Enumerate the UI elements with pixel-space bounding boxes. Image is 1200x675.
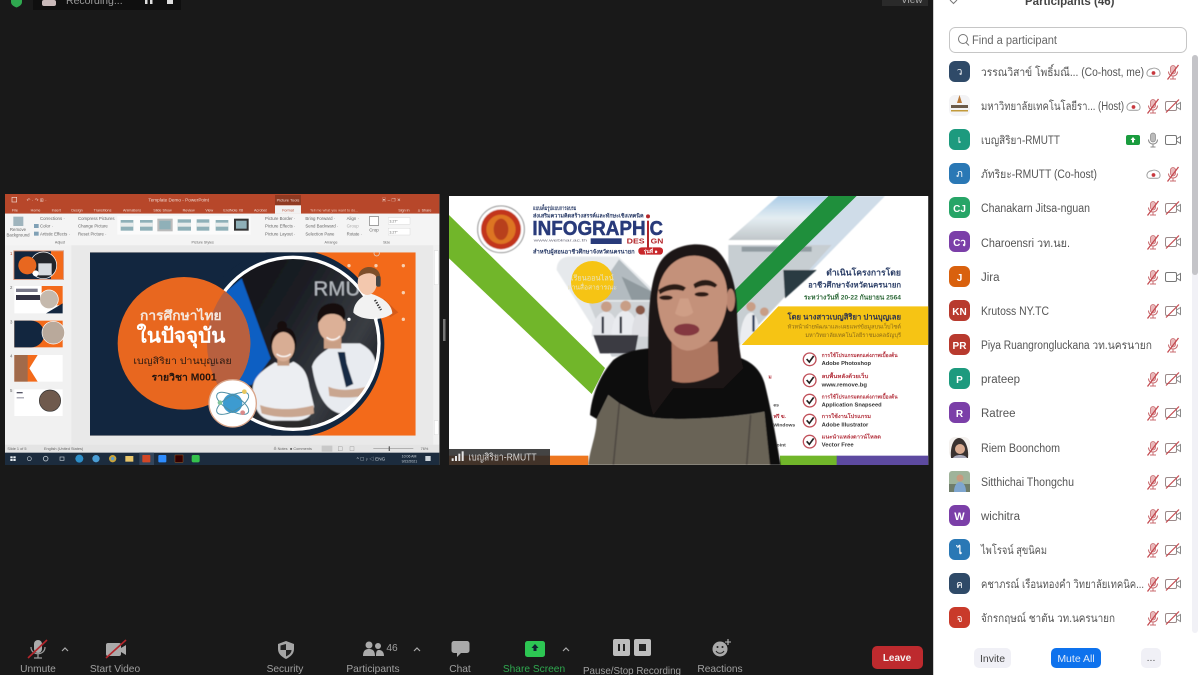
participant row 9: Piya Ruangrongluckana วท.นครนายก: [981, 340, 1152, 352]
panel: participants sidebar: [933, 0, 1200, 675]
participant row 13: Sitthichai Thongchu: [981, 477, 1074, 489]
slide thumbnails: 1: [10, 251, 13, 256]
student: girl: [253, 321, 314, 428]
participant row 16: [949, 573, 1180, 594]
project description: ดำเนินโครงการโดย: [826, 267, 901, 278]
slide photo with two students: [226, 259, 378, 428]
Windows taskbar: [5, 453, 439, 465]
project description: อาชีวศึกษาจังหวัดนครนายก: [808, 281, 901, 290]
hidden left checklist fragments: ฟรี ฆ.: [773, 413, 787, 420]
reactions button: Reactions: [697, 664, 743, 675]
participant row 3: เบญสิริยา-RMUTT: [981, 134, 1060, 147]
yellow circle badge: เรียนออนไลน์: [571, 274, 614, 283]
participant row 10: P: [956, 375, 963, 386]
participant row 9: [949, 334, 1178, 355]
share screen button: Share Screen: [503, 664, 565, 675]
participant row 15: [949, 539, 1180, 560]
orange title circle: [118, 277, 250, 410]
hidden left checklist fragments: Point: [773, 443, 786, 449]
mute all button: [1051, 648, 1101, 668]
poster title: แบบเต็มรูปแบบการอบรม: [533, 203, 577, 213]
white ring: [207, 257, 379, 429]
poster title: INFOGRAPH: [532, 218, 646, 240]
PowerPoint title bar: Template Demo - PowerPoint: [148, 198, 210, 203]
PowerPoint status bar: 76%: [421, 447, 429, 451]
participant row 11: [949, 402, 1180, 423]
PowerPoint ribbon: Picture Styles: [191, 240, 214, 244]
poster title: www.webinar.ac.th: [534, 238, 587, 243]
participant row 13: [949, 471, 1180, 492]
participant row 16: ค: [956, 580, 963, 591]
poster title: DES: [627, 236, 645, 245]
hidden left checklist fragments: Windows: [773, 423, 795, 429]
view button: [882, 0, 928, 6]
orange title circle: ในปัจจุบัน: [137, 324, 225, 349]
PowerPoint title bar: ♙ Share: [417, 208, 431, 212]
participant row 2: [949, 95, 1180, 116]
PowerPoint title bar: Sign in: [398, 208, 410, 212]
presenter name label: [449, 449, 550, 465]
more button: [1141, 648, 1161, 668]
PowerPoint ribbon: Send Backward ·: [305, 224, 338, 229]
participants button: 46: [386, 643, 398, 654]
checklist items: ลบพื้นหลังด้วยเว็บ: [822, 371, 869, 380]
yellow speaker band: หัวหน้าฝ่ายพัฒนาและเผยแพร่ข้อมูลบนเว็บไซต์: [788, 321, 901, 330]
participant row 8: Krutoss NY.TC: [981, 306, 1049, 318]
participant row 17: จักรกฤษณ์ ชาตัน วท.นครนายก: [981, 611, 1115, 625]
student: boy: [312, 303, 376, 413]
icon: green shield: [11, 0, 22, 8]
PowerPoint ribbon: Rotate ·: [347, 231, 362, 236]
participant row 4: [949, 163, 1178, 184]
PowerPoint ribbon: Compress Pictures: [78, 216, 115, 221]
gallery divider handle: [443, 319, 446, 341]
PowerPoint ribbon: Crop: [369, 228, 379, 233]
participant row 14: wichitra: [980, 511, 1021, 523]
participant row 1: ว: [957, 67, 962, 78]
PowerPoint ribbon: Background: [6, 233, 30, 238]
PowerPoint ribbon: Change Picture: [78, 224, 108, 229]
presenter name label: เบญสิริยา-RMUTT: [468, 453, 537, 464]
PowerPoint ribbon: Selection Pane: [305, 231, 335, 236]
participant row 5: CJ: [953, 204, 966, 215]
checklist items: การใช้งานโปรแกรม: [822, 412, 871, 420]
sidebar heading: [950, 0, 1115, 8]
participant row 14: [949, 505, 1180, 526]
more button: ...: [1147, 652, 1155, 664]
yellow circle badge: ผ่านสื่อสาธารณะ: [568, 282, 617, 291]
chat button: Chat: [449, 664, 471, 675]
participant row 8: [949, 300, 1180, 321]
PowerPoint ribbon: Artistic Effects ·: [40, 231, 70, 236]
PowerPoint title bar: Design: [71, 208, 83, 212]
Windows taskbar: 9/22/2021: [402, 460, 417, 464]
PowerPoint title bar: Picture Tools: [277, 198, 299, 203]
PowerPoint ribbon: Size: [383, 240, 390, 244]
participant row 6: [949, 231, 1180, 252]
checklist items: Adobe Illustrator: [822, 423, 868, 429]
participant row 10: prateep: [981, 374, 1020, 386]
participant row 4: ภ: [956, 169, 963, 180]
hidden left checklist fragments: [768, 374, 795, 449]
PowerPoint title bar: Insert: [52, 208, 61, 212]
poster title: รุ่นที่ ๑: [644, 247, 658, 255]
PowerPoint ribbon: 3.27": [389, 220, 398, 224]
panel: presenter video: [449, 196, 928, 465]
PowerPoint title bar: Format: [282, 208, 294, 212]
PowerPoint ribbon: Arrange: [324, 240, 338, 244]
participant row 14: W: [954, 511, 965, 523]
PowerPoint title bar: ▣ – ❐ ✕: [382, 197, 401, 202]
PowerPoint ribbon: Reset Picture ·: [78, 231, 107, 236]
PowerPoint ribbon: Group: [347, 224, 359, 229]
project description: ระหว่างวันที่ 20-22 กันยายน 2564: [804, 292, 901, 302]
PowerPoint status bar: ■ Comments: [290, 447, 312, 451]
slide title: การศึกษาไทย: [140, 307, 222, 323]
participant row 7: [949, 266, 1180, 287]
participant row 2: มหาวิทยาลัยเทคโนโลยีรา... (Host): [981, 99, 1124, 113]
PowerPoint status bar: [5, 445, 439, 453]
PowerPoint ribbon: Picture Effects ·: [265, 224, 295, 229]
panel: shared PowerPoint screen: [5, 194, 439, 465]
bottom toolbar: [20, 639, 923, 675]
yellow circle badge: [568, 261, 617, 304]
search box: [950, 28, 1186, 52]
pause/stop recording button: [583, 639, 681, 675]
search box: Find a participant: [972, 35, 1058, 47]
checklist items: Application Snapseed: [822, 403, 882, 409]
slide thumbnails: 4: [10, 354, 13, 359]
poster title: [532, 203, 664, 256]
participant row 15: ไพโรจน์ สุขนิคม: [980, 543, 1047, 557]
PowerPoint title bar: Tell me what you want to do...: [310, 208, 358, 212]
slide thumbnails: 5: [10, 388, 13, 393]
participant row 7: Jira: [981, 272, 1000, 284]
security button: [267, 641, 304, 675]
participant row 6: Charoensri วท.นย.: [981, 238, 1070, 250]
PowerPoint ribbon: Corrections ·: [40, 216, 65, 221]
participant row 11: Ratree: [981, 408, 1016, 420]
PowerPoint ribbon: Color ·: [40, 224, 53, 229]
project description: [804, 267, 901, 302]
checklist items: Adobe Photoshop: [822, 361, 872, 367]
start video button: Start Video: [90, 664, 140, 675]
top status bar: [11, 0, 928, 10]
leave button: [872, 646, 923, 669]
participant list: [949, 61, 1180, 628]
main slide: [90, 249, 416, 438]
icon: atom badge: [209, 380, 256, 427]
invite button: [974, 648, 1011, 668]
background poster photo panel: [557, 196, 885, 357]
participant row 17: จ: [957, 614, 963, 625]
logo seal: [478, 206, 524, 253]
share screen button: [503, 641, 569, 675]
PowerPoint title bar: ↶ · ↷ ⊞ ·: [27, 197, 47, 202]
participant row 10: [949, 368, 1180, 389]
PowerPoint title bar: Acrobat: [254, 208, 267, 212]
PowerPoint ribbon: Picture Border ·: [265, 216, 295, 221]
scrollbar: [1192, 55, 1198, 633]
PowerPoint title bar: Home: [31, 208, 40, 212]
PowerPoint ribbon: Align ·: [347, 216, 359, 221]
poster staff group: [592, 301, 769, 353]
PowerPoint title bar: Animations: [123, 208, 141, 212]
unmute button: Unmute: [20, 664, 56, 675]
slide thumbnails: 3: [10, 319, 13, 324]
poster title: GN: [651, 236, 664, 245]
PowerPoint title bar: View: [205, 208, 214, 212]
participant row 4: ภัทริยะ-RMUTT (Co-host): [981, 168, 1097, 181]
participant row 7: J: [957, 273, 962, 284]
PowerPoint title bar: Slide Show: [153, 208, 172, 212]
yellow speaker band: [742, 306, 928, 345]
participants button: Participants: [346, 664, 400, 675]
leave button: Leave: [883, 653, 912, 664]
hidden left checklist fragments: es: [773, 403, 779, 409]
PowerPoint ribbon: Bring Forward ·: [305, 216, 335, 221]
PowerPoint title bar: Transitions: [94, 208, 112, 212]
PowerPoint status bar: English (United States): [44, 447, 84, 451]
reactions button: [697, 639, 743, 675]
participant row 3: [949, 129, 1180, 150]
participant row 1: วรรณวิสาข์ โพธิ์มณี... (Co-host, me): [981, 63, 1144, 79]
main video area background: [0, 0, 933, 675]
chat button: [449, 641, 471, 675]
invite button: Invite: [980, 653, 1005, 665]
checklist items: การใช้โปรแกรมตกแต่งภาพเบื้องต้น: [822, 392, 898, 401]
recording indicator: [33, 0, 181, 10]
poster title: ส่งเสริมความคิดสร้างสรรค์และทักษะเชิงเทคนิค: [533, 211, 644, 219]
participant row 6: Cว: [953, 238, 966, 249]
unmute button: [20, 640, 68, 675]
checklist items: แนะนำแหล่งดาวน์โหลด: [822, 433, 882, 441]
PowerPoint ribbon: Picture Layout ·: [265, 231, 295, 236]
participant row 11: R: [956, 409, 964, 420]
PowerPoint ribbon: 3.27": [389, 230, 398, 234]
participant row 5: [949, 197, 1180, 218]
yellow speaker band: โดย นางสาวเบญสิริยา ปานบุญเลย: [786, 311, 901, 322]
participant row 15: ไ: [956, 544, 962, 557]
PowerPoint ribbon: Adjust: [55, 240, 65, 244]
icon: headset agent with selection handles: [347, 251, 405, 321]
dark green diagonal stripe: [735, 196, 857, 315]
security button: Security: [267, 664, 304, 675]
participant row 8: KN: [952, 307, 967, 318]
poster title: C: [650, 218, 663, 240]
slide thumbnails: 2: [10, 285, 13, 290]
PowerPoint scrollbar: [433, 245, 439, 445]
slide thumbnails: [10, 250, 65, 416]
orange title circle: รายวิชา M001: [152, 373, 217, 384]
checklist items: [803, 350, 898, 449]
presenter: [588, 244, 781, 465]
participants button: [346, 642, 420, 675]
participant row 3: เ: [958, 135, 961, 146]
participant row 12: Riem Boonchom: [981, 443, 1060, 455]
Windows taskbar: ^ ☐ ♪ ◁ ENG: [357, 457, 386, 462]
poster title: สำหรับผู้สอนอาชีวศึกษาจังหวัดนครนายก: [533, 247, 635, 256]
checklist items: www.remove.bg: [821, 382, 867, 388]
participant row 5: Chanakarn Jitsa-nguan: [981, 203, 1090, 215]
PowerPoint title bar: Review: [183, 208, 195, 212]
hidden left checklist fragments: ม: [768, 374, 772, 380]
orange title circle: เบญสิริยา ปานบุญเลย: [133, 356, 232, 367]
participant row 12: [949, 437, 1180, 458]
light green diagonal stripe: [449, 215, 605, 394]
PowerPoint title bar: [5, 194, 439, 214]
PowerPoint title bar: EndNote X8: [223, 208, 243, 212]
PowerPoint title bar: File: [12, 208, 18, 212]
mute all button: Mute All: [1057, 653, 1095, 665]
checklist items: Vector Free: [822, 443, 854, 449]
PowerPoint ribbon: [5, 214, 439, 245]
sidebar footer buttons: [974, 648, 1161, 668]
PowerPoint status bar: ≜ Notes: [273, 446, 288, 451]
yellow speaker band: มหาวิทยาลัยเทคโนโลยีราชมงคลธัญบุรี: [805, 331, 901, 339]
PowerPoint ribbon: Remove: [10, 227, 27, 232]
participant row 16: คชาภรณ์ เรือนทองคำ วิทยาลัยเทคนิค...: [981, 577, 1144, 591]
checklist items: การใช้โปรแกรมตกแต่งภาพเบื้องต้น: [822, 350, 898, 359]
participant row 1: [949, 61, 1178, 82]
start video button: [90, 640, 140, 675]
PowerPoint status bar: Slide 1 of 5: [7, 447, 26, 451]
Windows taskbar: 10:06 AM: [402, 454, 416, 458]
bottom colour strip: [449, 456, 928, 465]
participant row 17: [949, 607, 1180, 628]
participant row 9: PR: [953, 341, 967, 352]
slide photo with two students: RMUT: [313, 278, 373, 301]
